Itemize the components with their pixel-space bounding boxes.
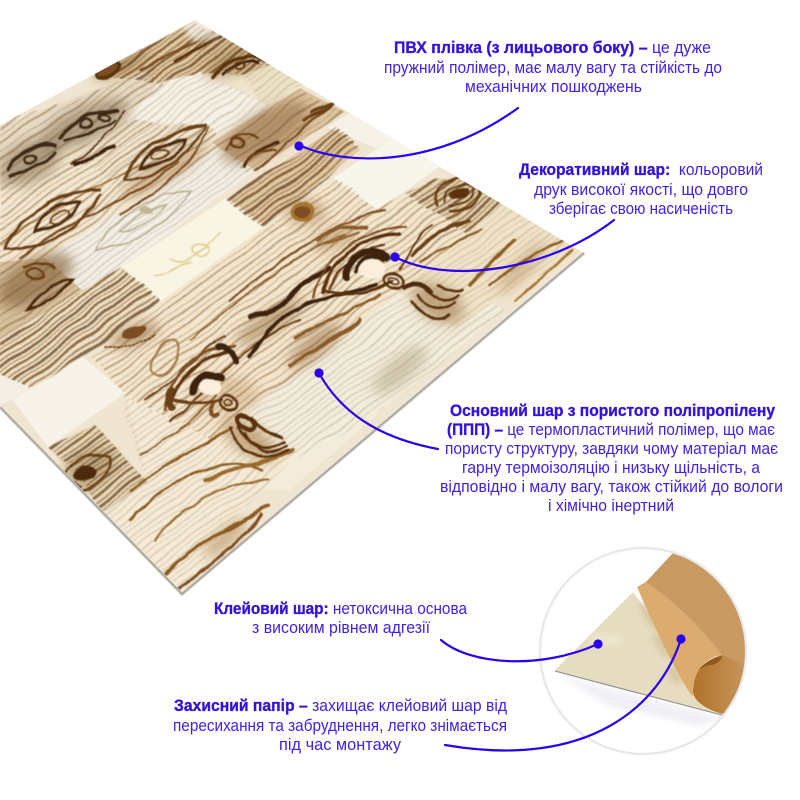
knot: lower burned (165, 345, 288, 456)
knot: eye left (5, 190, 100, 250)
inner roll (693, 655, 744, 714)
callout 1: PVC film (294, 38, 722, 158)
arrow: PVC film leader (294, 108, 518, 158)
text: protective paper: Захисний папір – захищає клейовий шар від (174, 696, 507, 715)
arrow: adhesive leader (441, 639, 603, 661)
knot: grey plank faint (95, 190, 190, 250)
text: base layer (440, 401, 783, 515)
text: PVC film: ПВХ плівка (з лицьового боку) – це дуже (394, 38, 711, 57)
text: decorative layer: друк високої якості, що довго (534, 180, 748, 199)
plank surface (0, 0, 600, 600)
plank fills (0, 20, 582, 512)
grain overlay (0, 20, 582, 592)
brown backing (646, 554, 745, 714)
knot: central small (293, 204, 365, 246)
text: PVC film (384, 38, 722, 96)
text: base layer: Основний шар з пористого поліпропілену (450, 401, 775, 420)
knot: bottom-left dark (62, 456, 110, 491)
text: base layer: (ППП) – це термопластичний полімер, що має (447, 420, 775, 439)
arrow: paper leader (445, 634, 686, 750)
cream texture (587, 598, 684, 686)
cream adhesive (555, 592, 722, 714)
knot: top left (94, 48, 140, 82)
panel: back detail circle (441, 540, 760, 754)
panel: wood wall panel (0, 0, 600, 600)
arrow: base leader (314, 368, 438, 449)
text: protective paper (173, 696, 507, 754)
fold (637, 582, 722, 697)
text: adhesive layer (214, 599, 467, 637)
knots (5, 48, 480, 491)
text: base layer: і хімічно інертний (548, 496, 674, 515)
knot: top right (213, 57, 265, 78)
knot: cream plank yellow (155, 232, 220, 276)
arrow: decorative leader (390, 220, 614, 271)
text: adhesive layer: Клейовий шар: нетоксична основа (214, 599, 467, 618)
top corner fade (180, 16, 222, 42)
text: decorative layer (519, 160, 763, 218)
burned streaks (0, 32, 572, 590)
knot: tan plank (225, 106, 330, 165)
callout 3: base layer (314, 368, 783, 515)
peeled corner illustration (554, 554, 745, 726)
text: decorative layer: Декоративний шар: кольоровий (519, 160, 763, 179)
text: PVC film: механічних пошкоджень (465, 77, 642, 96)
text: decorative layer: зберігає свою насиченість (549, 199, 733, 218)
knot: left lower (25, 264, 185, 381)
board edge (555, 671, 722, 715)
text: PVC film: пружний полімер, має малу вагу та стійкість до (384, 58, 722, 77)
text: protective paper: пересихання та забруднення, легко знімається (173, 716, 507, 735)
knot: upper-left pair (8, 110, 118, 176)
circle frame (540, 548, 746, 754)
text: base layer: гарну термоізоляцію і низьку щільність, а (462, 458, 760, 477)
knot: eye centre (125, 125, 205, 180)
knot: main burned (314, 225, 462, 319)
knot: right dark oval (435, 176, 480, 212)
panel shadow edge (0, 253, 584, 594)
text: protective paper: під час монтажу (279, 735, 401, 754)
callout 2: decorative layer (390, 160, 763, 271)
roll rim (697, 656, 722, 672)
soft shadow (572, 680, 716, 726)
text: adhesive layer: з високим рівнем адгезії (252, 618, 430, 637)
text: base layer: відповідно і малу вагу, також стійкий до вологи (440, 477, 783, 496)
burn halos (0, 33, 551, 562)
